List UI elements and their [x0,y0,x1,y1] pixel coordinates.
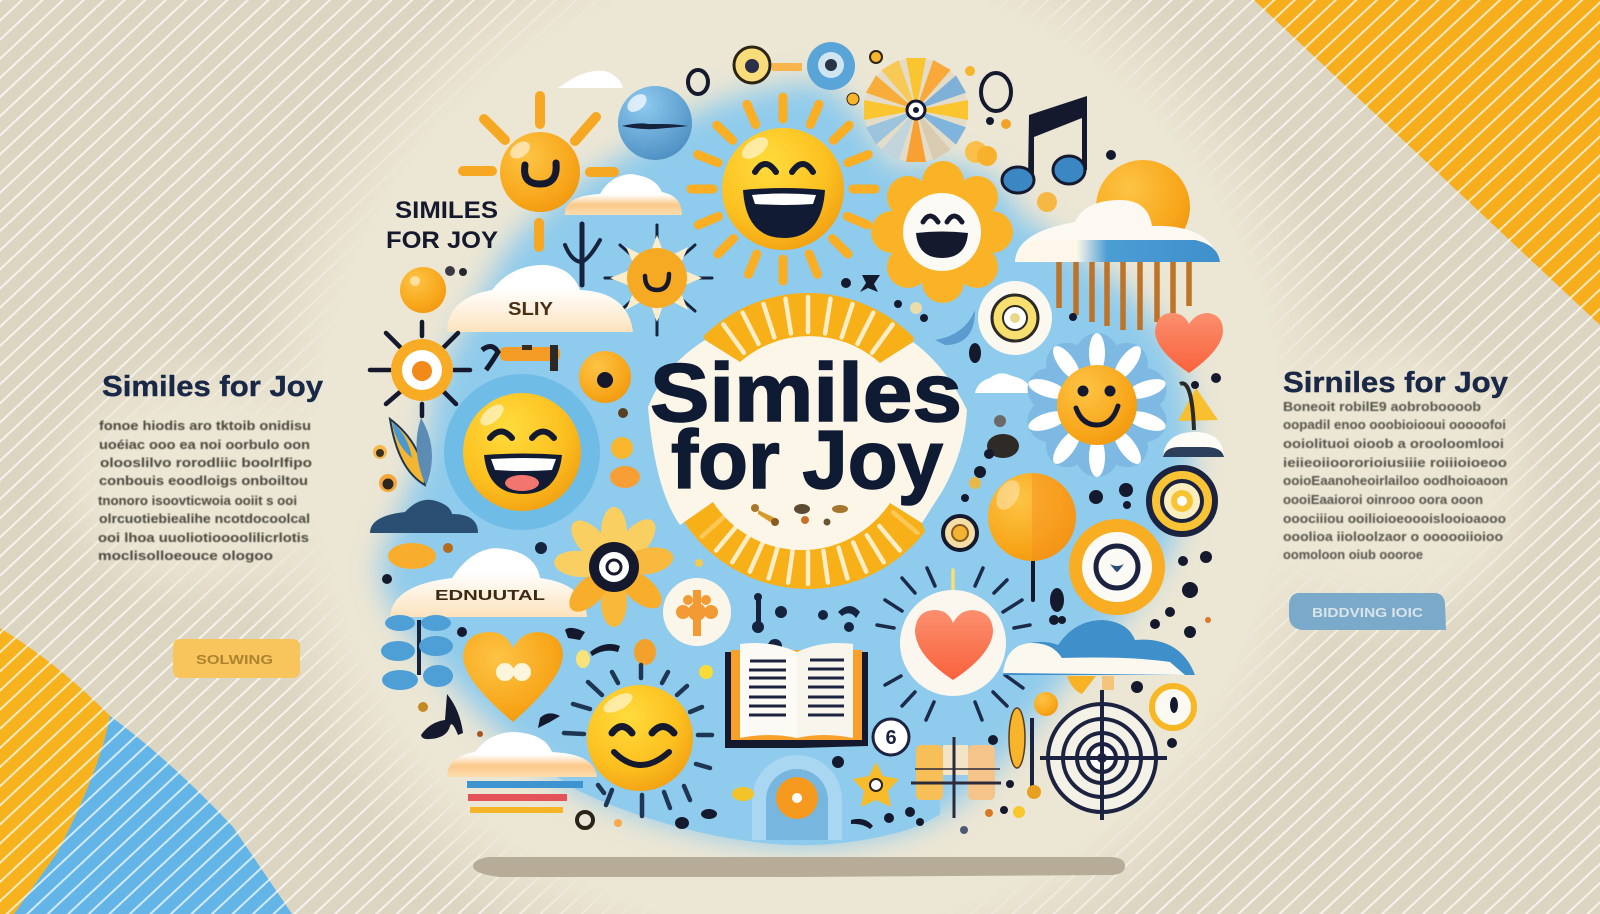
main title: for Joy [671,413,943,506]
icon: pinwheel [864,58,968,162]
icon: yellow ring eye [1152,686,1194,728]
icon: blue ball [618,86,692,160]
icon: peach cloud [565,174,682,215]
icon: dark cloud [370,500,478,533]
icon: big laughing sun [691,97,875,281]
icon: star [853,762,899,807]
left text panel [98,371,323,678]
icon: small navy ring [943,516,977,550]
icon: yellow bar and pin [1009,708,1041,799]
right panel body text: ooiolituoi oioob a orooloomlooi [1283,437,1504,451]
icon: orange disc with dot [579,351,631,403]
icon: coral heart [1155,313,1223,373]
icon: sun with eye [370,322,470,416]
left panel button [173,639,300,678]
icon: cream flower with black eye [553,507,675,627]
corner shape: yellow top right [1254,0,1600,325]
icon: small white cloud top [558,71,623,88]
icon: blue eye ball [807,42,855,90]
right panel body text: oomoloon oiub oooroe [1283,548,1423,562]
left panel heading: Similes for Joy [102,371,323,403]
icon: small black ring [688,70,708,94]
right panel button [1289,593,1446,630]
icon: smiling emoji bottom [564,665,712,816]
left panel body text: olrcuotiebiealihe ncotdocoolcal [99,512,310,526]
central title badge [648,293,967,589]
right panel body text: oopadil enoo ooobioiooui ooooofoi [1283,418,1506,432]
small orange shapes under cloud [1034,676,1177,748]
cloud labelled SLIY: SLIY [508,299,553,319]
corner shape: blue bottom left [14,716,292,914]
icon: yellow navy target [1149,468,1215,534]
icon: smiling sun top left [463,96,614,247]
icon: orange blob [388,543,436,569]
small rings near pinwheel [847,51,1116,212]
sun ring [648,293,967,589]
colour stripes [467,781,583,813]
left panel body text: moclisolloeouce ologoo [98,549,273,563]
icon: small flower sun [605,225,712,335]
icon: orange heart [463,632,563,722]
icon: yellow target on white disc [978,281,1052,355]
blue central blob [380,82,1192,845]
small ring and dots bottom [418,702,754,829]
small specks center right [841,275,1212,644]
right panel button: BIDDVING IOIC [1312,605,1424,620]
left panel body text: ooi lhoa uuoliotioooolilicrlotis [98,531,309,545]
cloud labelled EDNUUTAL [390,548,587,617]
cloud labelled EDNUUTAL: EDNUUTAL [435,587,545,604]
right panel body text: oooiEaaioroi oinrooo oora ooon [1283,493,1483,507]
small marks around heart [457,627,713,728]
icon: small sail plant [1163,373,1224,457]
cloud labelled SLIY [447,265,633,332]
icon: rain cloud [1015,200,1220,330]
icon: orange sun behind cloud [1096,160,1190,254]
small heading: Similes for Joy: SIMILES [395,197,498,224]
icon: crosshair target [1040,690,1167,820]
small specks bottom right [832,735,1025,834]
icon: yellow flower with smile [871,161,1013,303]
left panel body text [98,419,312,563]
icon: orange bar with dark marks [482,345,560,371]
ground shadow [473,857,1125,877]
right panel body text: ooolioa iioloolzaor o oooooiioioo [1283,530,1503,544]
icon: small cloud right [975,373,1032,393]
decorative specks in badge [751,504,848,526]
right text panel [1283,367,1508,630]
left panel body text: fonoe hiodis aro tktoib onidisu [99,419,311,433]
icon: heart on white disc [877,568,1030,720]
small heading: Similes for Joy [386,197,498,254]
right panel body text: ooioEaanoheoirlailoo oodhoioaoon [1283,474,1508,488]
right panel body text: Boneoit robilE9 aobroboooob [1283,400,1481,414]
icon: blue leaf sprig [381,615,453,690]
small heading: Similes for Joy: FOR JOY [386,227,498,254]
left panel body text: uoéiac ooo ea noi oorbulo oon [99,438,310,452]
main title [650,346,962,506]
icon: blue arch with orange core [752,755,842,840]
icon: big laughing emoji [444,374,600,530]
icon: 6 in ring [873,719,909,755]
icon: orange eye disc [1069,519,1165,615]
icon: cloud bottom left [447,732,597,777]
corner shape: yellow bottom left [0,628,110,914]
left panel body text: olooslilvo rorodliic boolrlfipo [100,456,312,470]
small specks left [373,266,703,584]
icon: blue cloud [1003,620,1195,675]
icon: orange ball [400,267,446,313]
icon: window with orange panes [911,737,1001,818]
right panel body text [1283,400,1508,562]
icon: leaf [390,418,432,486]
left panel button: SOLWING [196,652,273,667]
icon: music note [1002,96,1087,193]
icon: book [725,643,868,748]
left panel body text: conbouis eoodloigs onboiltou [99,474,308,488]
icon: white blossom [663,578,731,646]
icon: dark plant [565,224,600,285]
right panel body text: ieiieoiioororioiusiiie roiiioioeoo [1283,456,1507,470]
icon: yellow eye ring [734,47,802,83]
icon: small musical marks [752,593,860,653]
main title: Similes [650,346,962,439]
icon: orange lollipop [988,473,1076,600]
left panel body text: tnonoro isoovticwoia ooiit s ooi [98,494,297,508]
right panel body text: ooociiiou ooilioioeoooislooioaooo [1283,512,1506,526]
icon: blue white flower with smile [1022,333,1172,477]
icon: 6 in ring: 6 [885,727,897,749]
right panel heading: Sirniles for Joy [1283,367,1508,399]
icon: dark music note [421,694,463,739]
